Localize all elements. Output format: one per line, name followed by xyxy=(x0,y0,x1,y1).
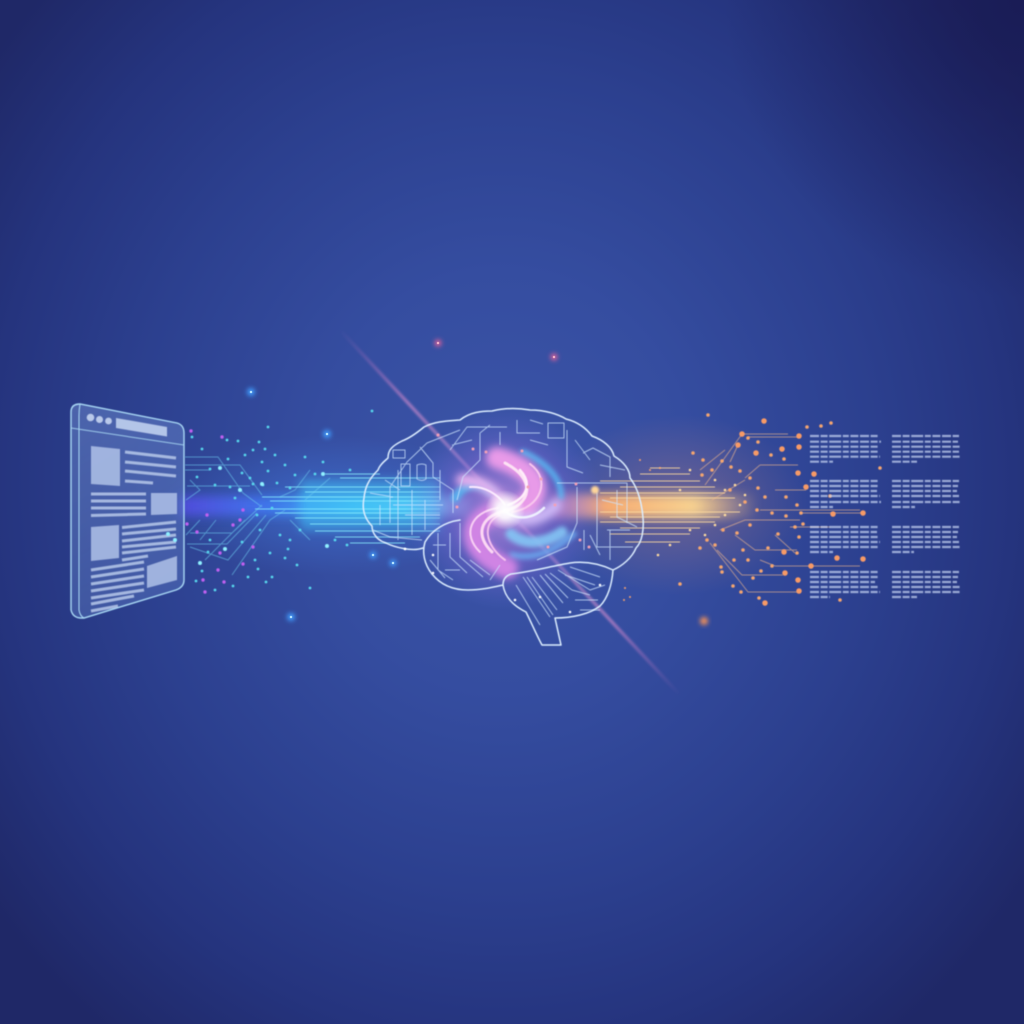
data particles: input side xyxy=(168,411,372,592)
page text lines xyxy=(91,452,176,611)
icon: window buttons xyxy=(87,414,112,424)
bright centre xyxy=(485,490,525,530)
spiral vortex at brain centre xyxy=(405,410,605,610)
brain outline xyxy=(363,409,643,645)
data particles: output side xyxy=(624,415,880,603)
paragraph 2 right xyxy=(892,481,961,507)
panel: glass page xyxy=(71,404,184,618)
page content blocks xyxy=(91,446,177,588)
blue swirl arcs xyxy=(455,452,574,556)
temporal lobe xyxy=(424,520,613,645)
pink swirl arms xyxy=(462,458,556,568)
paragraph 4 right xyxy=(892,572,961,597)
paragraph 1 left xyxy=(810,436,881,462)
paragraph 3 right xyxy=(892,527,960,552)
document panel xyxy=(71,404,184,618)
paragraph 3 left xyxy=(810,527,880,552)
glowing stars xyxy=(247,340,708,625)
light beam: output side xyxy=(550,468,755,542)
address bar xyxy=(116,418,167,436)
paragraph 4 left xyxy=(810,572,880,597)
brain circuitry xyxy=(370,420,637,625)
light beam: input side xyxy=(180,474,470,543)
paragraph 2 left xyxy=(810,481,881,507)
circuit traces: output side xyxy=(700,434,863,592)
bright swirl streaks xyxy=(470,463,544,560)
core glow xyxy=(405,410,605,610)
output text: two columns of four paragraphs, illegible rendered lines xyxy=(810,436,961,597)
paragraph 1 right xyxy=(892,436,961,462)
ambient glow behind the beam xyxy=(160,415,810,595)
circuit traces: input side xyxy=(185,457,330,575)
cerebrum xyxy=(363,409,643,570)
diagonal light ray xyxy=(340,330,680,695)
